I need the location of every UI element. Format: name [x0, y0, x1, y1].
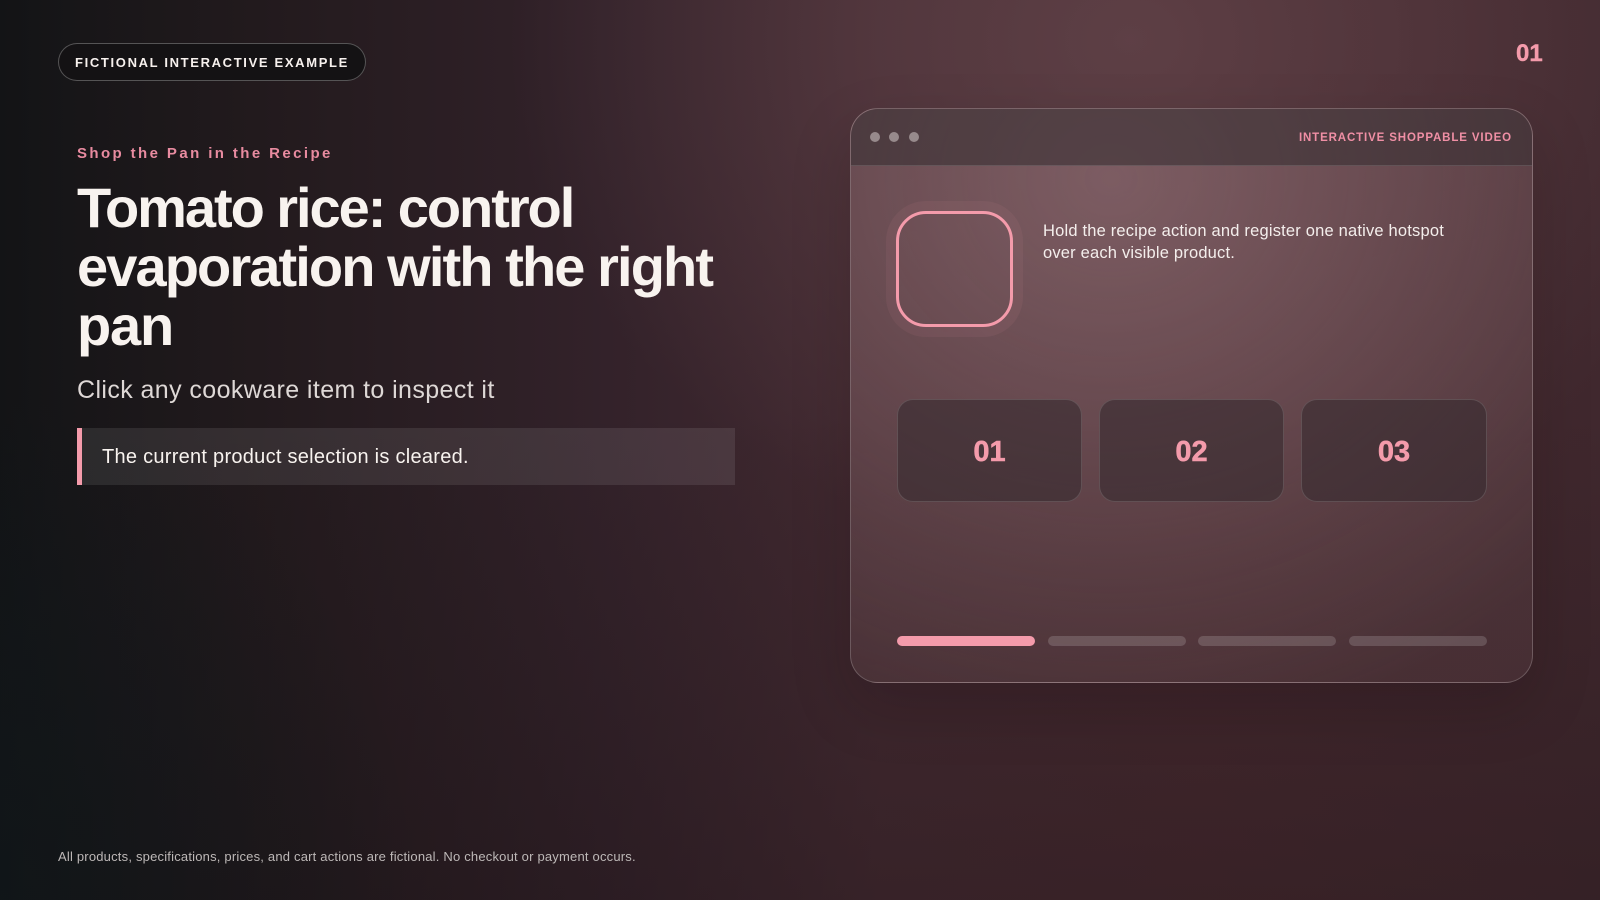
panel label: INTERACTIVE SHOPPABLE VIDEO — [1299, 132, 1512, 144]
badge: fictional interactive example — [58, 43, 366, 81]
page number: 01 — [1516, 40, 1543, 67]
hotspot frame — [896, 211, 1013, 327]
title: pan — [77, 294, 173, 357]
tile 02: 02 — [1175, 436, 1208, 468]
hotspot instructions: over each visible product. — [1043, 244, 1235, 262]
progress bars — [897, 636, 1487, 646]
title: Tomato rice: control — [77, 176, 573, 239]
badge: fictional interactive example: FICTIONAL INTERACTIVE EXAMPLE — [75, 55, 349, 70]
tile 01: 01 — [973, 436, 1006, 468]
tile 03: 03 — [1378, 436, 1410, 468]
panel: interactive shoppable video — [850, 108, 1533, 683]
segment 4 — [1349, 636, 1487, 646]
tile 03 — [1301, 399, 1487, 502]
status callout: The current product selection is cleared. — [102, 446, 469, 468]
window dots — [870, 132, 919, 142]
segment 2 — [1048, 636, 1186, 646]
tile 01 — [897, 399, 1082, 502]
window header bar — [851, 109, 1532, 166]
status callout — [77, 428, 735, 485]
subtitle: Click any cookware item to inspect it — [77, 376, 495, 404]
hotspot instructions — [1043, 222, 1444, 262]
active segment — [896, 636, 1034, 646]
eyebrow: Shop the Pan in the Recipe — [77, 145, 333, 162]
segment 3 — [1198, 636, 1336, 646]
title — [77, 176, 714, 357]
hotspot instructions: Hold the recipe action and register one native hotspot — [1043, 222, 1444, 240]
tile 02 — [1099, 399, 1284, 502]
footnote: All products, specifications, prices, and cart actions are fictional. No checkout or payment occurs. — [58, 849, 636, 864]
title: evaporation with the right — [77, 235, 712, 298]
